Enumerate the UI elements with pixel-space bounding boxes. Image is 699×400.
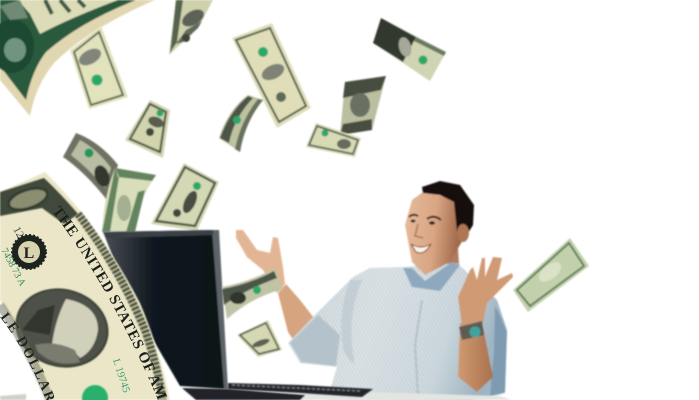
lower border text (0, 305, 50, 400)
bill: falling 3 (232, 23, 311, 128)
shirt (288, 263, 507, 400)
left hand (236, 230, 285, 293)
laptop base (182, 388, 305, 400)
smile (411, 244, 431, 253)
right sleeve shade (490, 305, 507, 396)
body fold (341, 280, 362, 365)
right forearm (458, 323, 493, 392)
bill: falling 9 (63, 133, 118, 200)
left forearm (278, 284, 314, 344)
bill: falling 6 (219, 95, 263, 152)
serial number right: L 19745 (110, 358, 131, 394)
green treasury seal (82, 385, 108, 400)
head (405, 192, 464, 275)
bill: foreground large (0, 172, 170, 400)
top border band (0, 178, 78, 224)
ear (457, 224, 469, 242)
keyboard (228, 383, 373, 397)
shirt texture (288, 263, 507, 400)
portrait (8, 279, 116, 377)
bill: falling 10 (102, 168, 156, 232)
bill: top-left large (0, 0, 155, 116)
eyes (409, 215, 441, 220)
seal: letter L: L (24, 245, 34, 262)
laptop (103, 230, 228, 389)
neck (418, 248, 460, 288)
bill: falling 2 (169, 0, 213, 55)
desk (0, 392, 512, 400)
ornament: top-left (6, 184, 50, 214)
watch (459, 321, 484, 340)
hair (422, 181, 474, 238)
right hand (458, 257, 513, 325)
bill corner number: 12 (10, 225, 26, 240)
bill: falling 7 (340, 76, 386, 135)
left sleeve (290, 315, 340, 366)
man (236, 181, 513, 400)
bill: falling 8 (306, 123, 361, 157)
collar (403, 262, 460, 291)
bill: right (513, 238, 589, 312)
bill: falling 11 (151, 163, 219, 231)
bill: falling 1 (70, 26, 128, 109)
bill: below hand (237, 320, 282, 357)
nose (415, 224, 423, 238)
bill: falling 5 (125, 100, 170, 158)
seal: letter L (12, 235, 46, 269)
outer border (78, 214, 163, 400)
bill: near hand (222, 268, 283, 319)
placket (415, 300, 422, 395)
bill: falling 4 (373, 18, 446, 81)
